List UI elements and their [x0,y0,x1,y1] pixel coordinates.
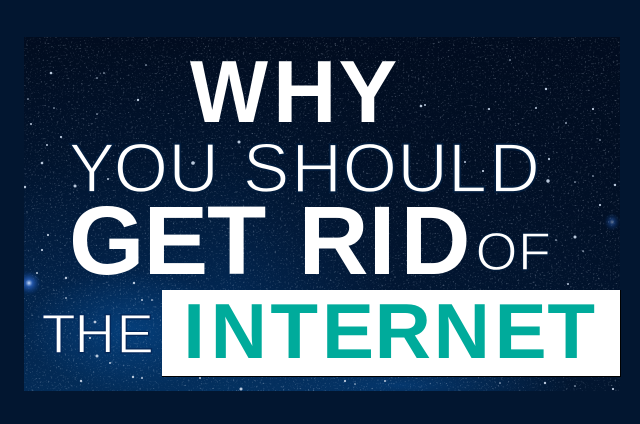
icon: bright blue star [24,272,40,294]
icon: blue star cluster [605,214,619,230]
infographic title banner [24,37,621,391]
heading: OF: OF [476,222,551,282]
heading: WHY: H [273,42,337,141]
heading: THE: THE [42,302,154,365]
heading: WHY: Y [338,42,397,141]
label box: INTERNET: INTERNET [183,287,595,375]
heading: WHY: W [190,42,268,141]
heading: GET RID: GET RID [69,186,471,295]
heading: WHY [190,42,397,141]
heading: YOU SHOULD: YOU SHOULD [68,129,540,207]
